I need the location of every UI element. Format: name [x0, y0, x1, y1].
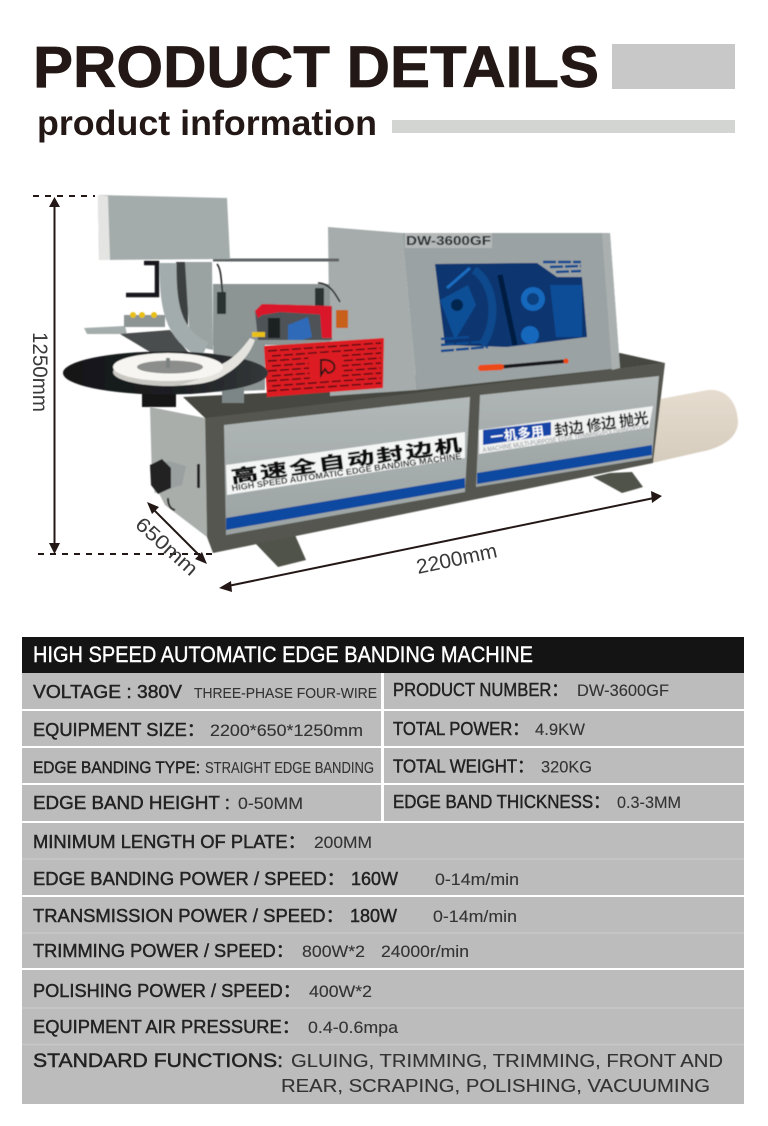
row: transmission power: 0-14m/min [433, 907, 517, 926]
row: polishing power: POLISHING POWER / SPEED： [33, 981, 301, 1001]
row: equipment size: 2200*650*1250mm [210, 721, 363, 740]
row: standard functions: REAR, SCRAPING, POLISHING, VACUUMING [281, 1075, 710, 1096]
rotary disc and edge band coil [63, 338, 268, 407]
row: edge band height: 0-50MM [238, 794, 303, 813]
specification table [22, 637, 744, 1104]
red guard [264, 338, 384, 397]
row: minimum length: 200MM [314, 833, 372, 852]
head window [435, 263, 587, 347]
table header [22, 637, 744, 673]
switch box [150, 459, 200, 510]
row: total weight: 320KG [541, 758, 592, 776]
row: trimming power [33, 941, 469, 961]
row: standard functions: STANDARD FUNCTIONS: [33, 1051, 283, 1072]
row: product number: PRODUCT NUMBER： [393, 680, 568, 700]
right cabinet panel [476, 376, 659, 487]
head housing front [402, 233, 620, 390]
row: minimum length: MINIMUM LENGTH OF PLATE： [33, 832, 306, 852]
row: air pressure: EQUIPMENT AIR PRESSURE： [33, 1017, 300, 1037]
cover pillar [185, 262, 213, 350]
row: edge banding power: 160W [351, 869, 398, 889]
row: edge band height: EDGE BAND HEIGHT : [33, 793, 230, 813]
row: trimming power: TRIMMING POWER / SPEED： [33, 941, 294, 961]
head vents [441, 262, 581, 351]
row: edge band thickness: EDGE BAND THICKNESS： [393, 792, 610, 812]
row: transmission power: TRANSMISSION POWER / SPEED： [33, 906, 344, 926]
right cabinet panel: A MACHINE MULTI-PURPOSE EDGE TRIMMING/POLISHING/EDGE [482, 424, 649, 454]
rear frame [176, 260, 348, 392]
row: equipment size [33, 720, 363, 740]
depth dimension: 650mm [131, 513, 202, 581]
cabinet frame [205, 363, 665, 553]
depth dimension [131, 502, 207, 581]
head housing side [328, 227, 417, 396]
row: standard functions: GLUING, TRIMMING, TRIMMING, FRONT AND [291, 1050, 723, 1071]
title: PRODUCT DETAILS [33, 35, 599, 100]
machine illustration [63, 195, 738, 567]
model number: DW-3600GF [406, 233, 491, 248]
row: edge banding type: EDGE BANDING TYPE: [33, 758, 200, 777]
left label text: 高速全自动封边机 [230, 435, 463, 487]
crank handle [126, 263, 157, 295]
row: product number: DW-3600GF [577, 681, 669, 700]
handle [481, 358, 569, 368]
row: edge banding power [33, 869, 519, 889]
row: edge band height [33, 793, 303, 813]
table rows [22, 673, 744, 1104]
row: total power: 4.9KW [535, 720, 585, 739]
row: trimming power: 800W*2 [302, 942, 365, 961]
table header: HIGH SPEED AUTOMATIC EDGE BANDING MACHINE [33, 642, 533, 667]
right label text: 一机多用 [490, 424, 545, 445]
length dimension: 2200mm [414, 539, 499, 579]
left cabinet panel [224, 397, 470, 535]
dust bag [652, 390, 738, 463]
row: total weight: TOTAL WEIGHT： [393, 756, 534, 776]
subtitle: product information [37, 104, 377, 143]
feed table [84, 312, 188, 352]
machine feet [255, 472, 643, 567]
glue pot unit [252, 304, 332, 340]
row: trimming power: 24000r/min [381, 942, 469, 961]
right cabinet panel: 封边 修边 抛光 [553, 409, 650, 440]
row: standard functions [33, 1050, 723, 1096]
row: polishing power: 400W*2 [309, 982, 372, 1001]
row: voltage: VOLTAGE : 380V [33, 682, 182, 702]
row: voltage: THREE-PHASE FOUR-WIRE [194, 685, 377, 702]
top cover box [98, 195, 230, 260]
row: edge banding power: 0-14m/min [435, 870, 519, 889]
guide tube [168, 263, 205, 350]
row: product number [393, 680, 669, 700]
row: edge banding power: EDGE BANDING POWER / SPEED： [33, 869, 345, 889]
length dimension [219, 491, 662, 592]
subtitle accent bar [392, 120, 735, 133]
row: edge banding type [33, 758, 374, 777]
row: air pressure: 0.4-0.6mpa [308, 1018, 399, 1037]
height dimension: 1250mm [28, 332, 51, 412]
row: transmission power [33, 906, 517, 926]
row: transmission power: 180W [350, 906, 397, 926]
row: edge band thickness: 0.3-3MM [617, 793, 681, 812]
height dimension [28, 196, 212, 554]
cabinet side [150, 407, 207, 537]
title accent block [612, 44, 735, 89]
row: voltage [33, 682, 377, 702]
row: edge banding type: STRAIGHT EDGE BANDING [205, 760, 374, 777]
left cabinet panel: HIGH SPEED AUTOMATIC EDGE BANDING MACHINE [231, 451, 462, 493]
row: equipment size: EQUIPMENT SIZE： [33, 720, 205, 740]
row: total power: TOTAL POWER： [393, 719, 529, 739]
